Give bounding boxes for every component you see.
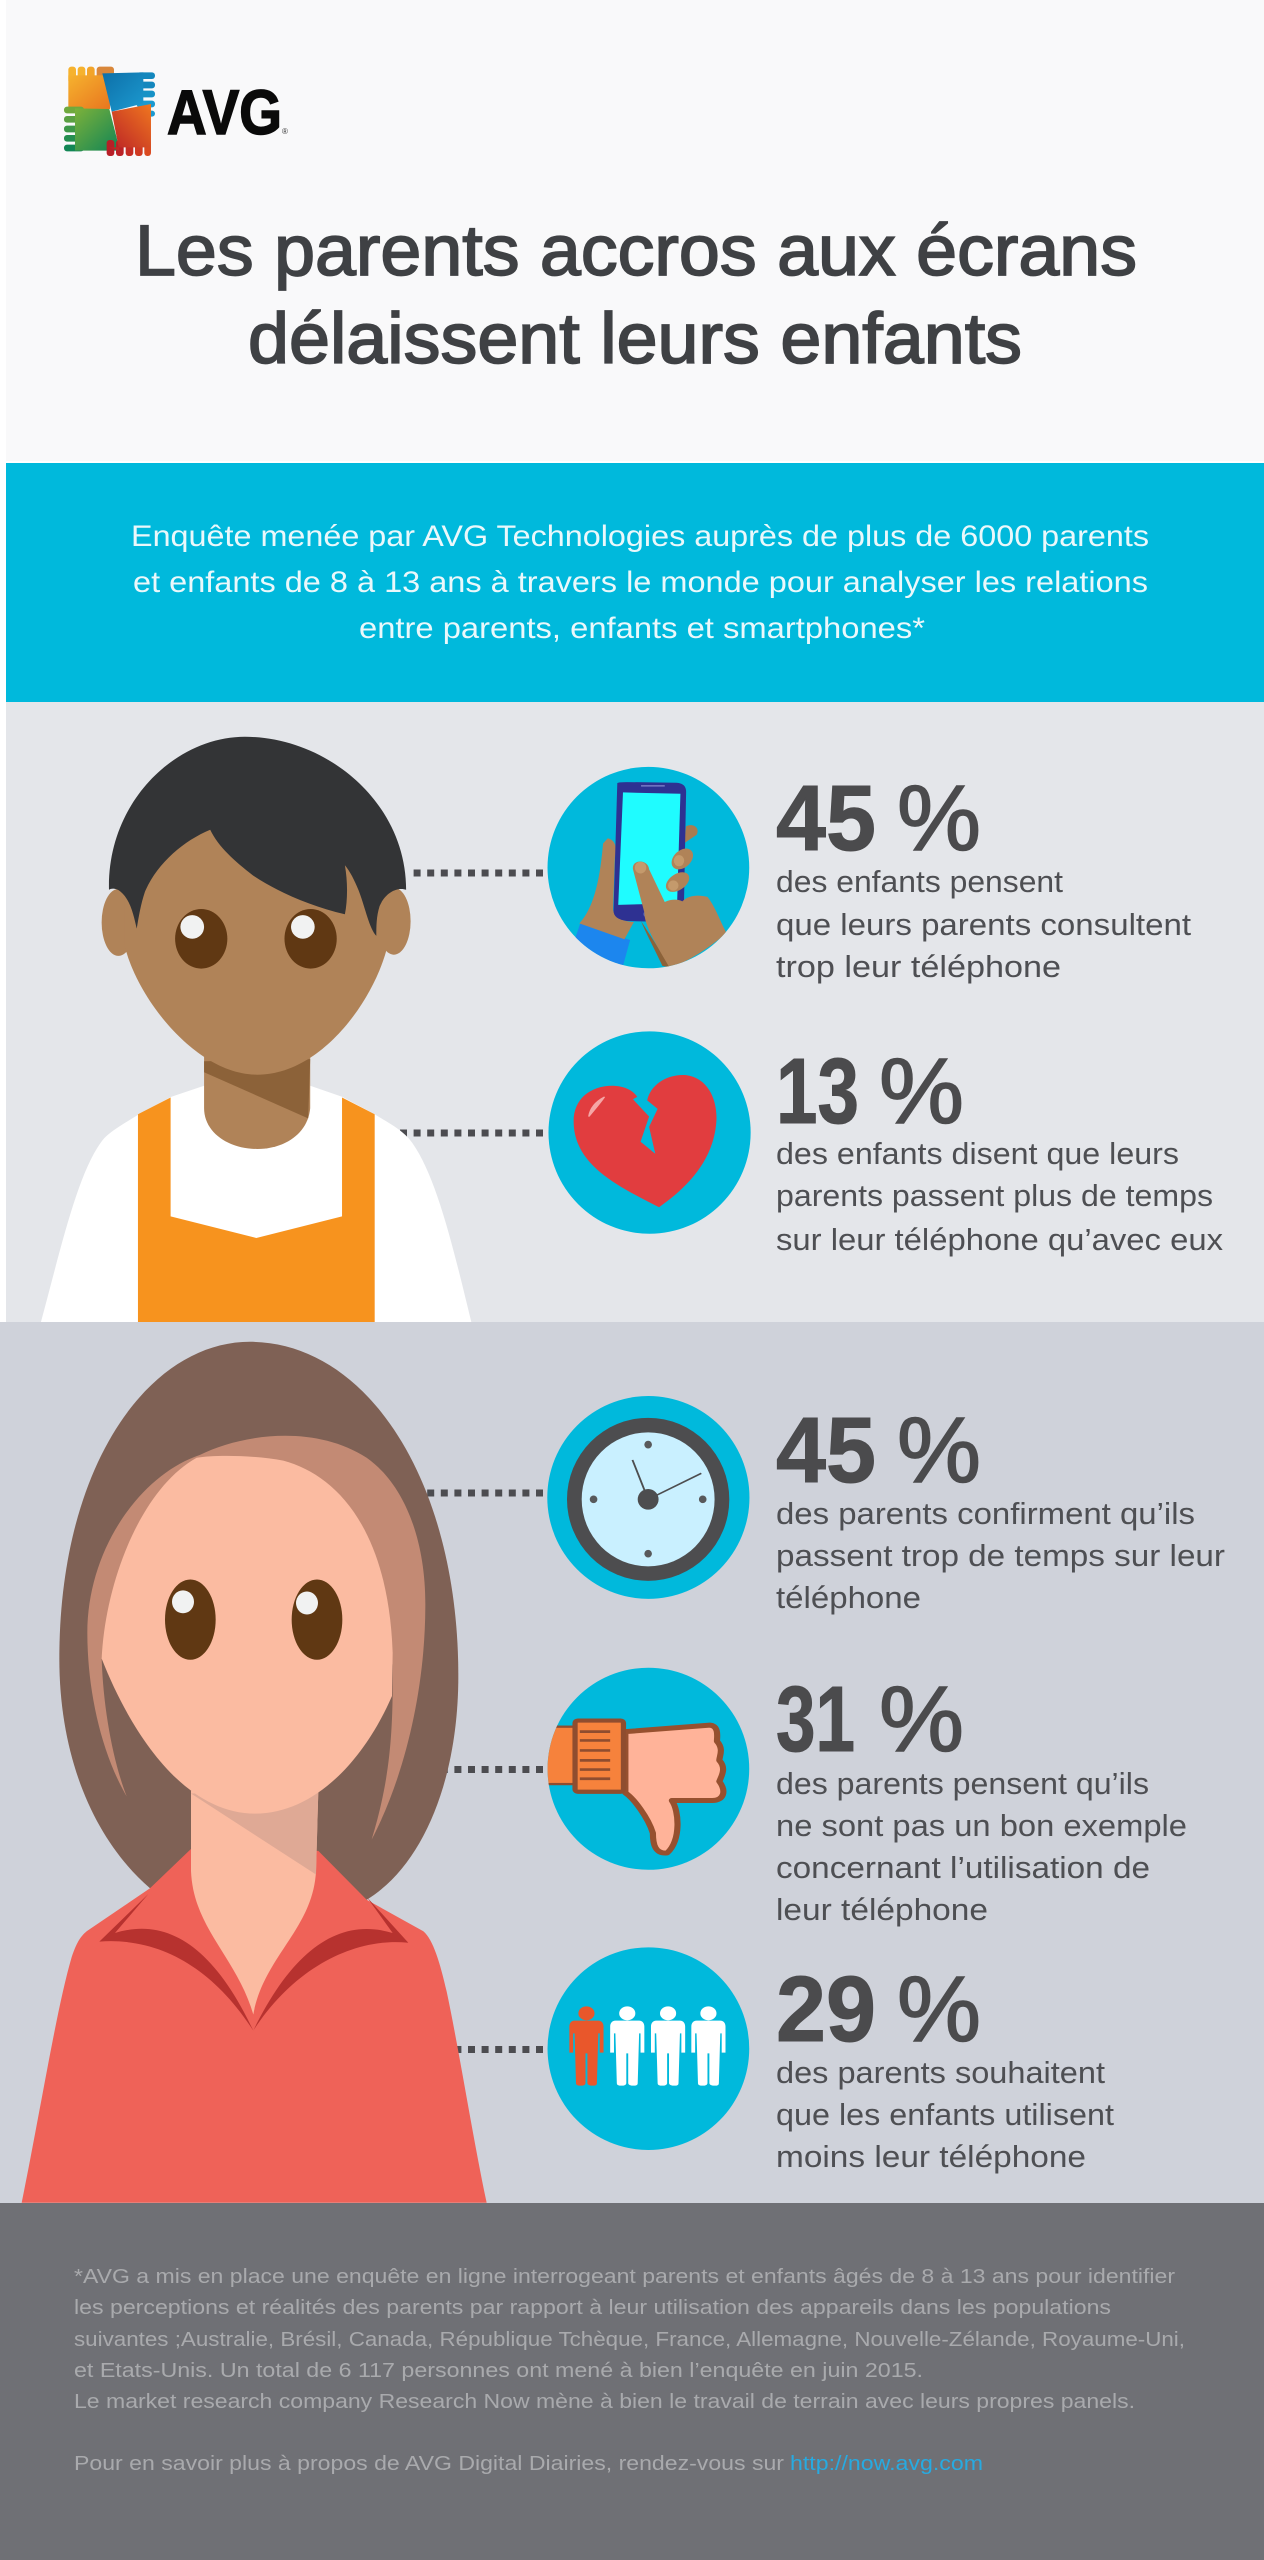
logo wordmark: ® [282, 127, 288, 136]
parent fringe [87, 1436, 425, 1839]
footnote text: *AVG a mis en place une enquête en ligne interrogeant parents et enfants âgés de 8 à 13 ans pour identifier [74, 2266, 1175, 2288]
footnote text [74, 2266, 1185, 2413]
stat: 45 % parents: % [897, 1398, 981, 1502]
left eye highlight [172, 1590, 194, 1613]
stat: 31 % parents: ne sont pas un bon exemple [776, 1808, 1187, 1843]
stat: 29 % parents: 29 [776, 1957, 876, 2061]
intro text: Enquête menée par AVG Technologies auprès de plus de 6000 parents [131, 520, 1149, 553]
connector: child to heart [395, 1130, 543, 1136]
neck shadow [191, 1791, 318, 1874]
stat: 13 % children [776, 1039, 1224, 1257]
icon: thumbs down [539, 1668, 749, 1870]
child shirt [41, 1086, 471, 1322]
child left ear [102, 889, 135, 956]
title: Les parents accros aux écrans [135, 212, 1137, 291]
intro text [131, 520, 1149, 645]
stat: 29 % parents: que les enfants utilisent [776, 2097, 1114, 2132]
connector: parent to thumb [430, 1766, 543, 1773]
parent shirt [22, 1849, 487, 2203]
person 4 [691, 2006, 726, 2086]
panel: parents [0, 1322, 1264, 2203]
intro text: entre parents, enfants et smartphones* [359, 612, 925, 645]
footnote text: les perceptions et réalités des parents par rapport à leur utilisation des appareils dans les populations [74, 2297, 1111, 2319]
stat: 31 % parents: concernant l’utilisation de [776, 1850, 1150, 1885]
right eye highlight [296, 1591, 318, 1614]
stat: 45 % children: 45 [776, 766, 876, 870]
child left eye [175, 909, 227, 969]
child hair [109, 737, 406, 936]
stat: 45 % children: que leurs parents consultent [776, 907, 1191, 942]
stat: 13 % children: sur leur téléphone qu’avec eux [776, 1222, 1224, 1257]
stat: 29 % parents: moins leur téléphone [776, 2139, 1086, 2174]
parent neck [191, 1791, 318, 2015]
panel: header [6, 0, 1264, 461]
stat: 31 % parents: des parents pensent qu’ils [776, 1766, 1149, 1801]
stat: 31 % parents: % [879, 1667, 964, 1771]
title [135, 212, 1137, 379]
footnote text: suivantes ;Australie, Brésil, Canada, République Tchèque, France, Allemagne, Nouvelle-Zélande, Royaume-Uni, [74, 2329, 1185, 2351]
icon: AVG four-colour mark [64, 67, 155, 156]
stat: 45 % parents [776, 1398, 1225, 1615]
logo: AVG [64, 67, 288, 156]
parent face [102, 1456, 393, 1814]
more information line: http://now.avg.com [790, 2453, 983, 2475]
more information line: Pour en savoir plus à propos de AVG Digital Diairies, rendez-vous sur [74, 2453, 784, 2475]
person 3 [651, 2006, 685, 2086]
panel: survey intro [6, 463, 1264, 702]
stat: 31 % parents [776, 1667, 1187, 1927]
child neck [204, 1051, 310, 1149]
icon: clock [547, 1396, 749, 1599]
stat: 45 % parents: 45 [776, 1398, 876, 1502]
person highlighted [569, 2006, 604, 2086]
intro text: et enfants de 8 à 13 ans à travers le monde pour analyser les relations [133, 566, 1148, 599]
stat: 45 % children: trop leur téléphone [776, 949, 1061, 984]
icon: four people [548, 1947, 749, 2150]
left eye highlight [180, 915, 204, 939]
right eye highlight [291, 915, 315, 939]
stat: 45 % children: % [897, 766, 981, 870]
stat: 45 % children: des enfants pensent [776, 864, 1063, 899]
panel: footer [0, 2203, 1264, 2560]
stat: 31 % parents: 31 [776, 1667, 855, 1771]
child illustration [41, 737, 471, 1322]
stat: 29 % parents [776, 1957, 1114, 2174]
connector: parent to clock [415, 1490, 543, 1496]
stat: 13 % children: des enfants disent que leurs [776, 1136, 1179, 1171]
stat: 45 % parents: téléphone [776, 1580, 921, 1615]
stat: 29 % parents: des parents souhaitent [776, 2055, 1105, 2090]
icon: hands holding phone [548, 767, 749, 969]
connector: child to phone [410, 870, 543, 876]
more information line [74, 2453, 983, 2475]
panel: children [6, 702, 1264, 1322]
logo wordmark: AVG [167, 78, 282, 148]
stat: 29 % parents: % [897, 1957, 981, 2061]
icon: broken heart [548, 1031, 751, 1234]
footnote text: Le market research company Research Now mène à bien le travail de terrain avec leurs propres panels. [74, 2391, 1135, 2413]
child face [124, 822, 388, 1075]
parent hair back [59, 1342, 458, 1900]
title: délaissent leurs enfants [248, 300, 1022, 379]
connector: parent to people [440, 2046, 543, 2053]
neck shadow [204, 1059, 310, 1118]
child right eye [284, 909, 337, 969]
stat: 45 % parents: des parents confirment qu’ils [776, 1496, 1195, 1531]
footnote text: et Etats-Unis. Un total de 6 117 personnes ont mené à bien l’enquête en juin 2015. [74, 2360, 923, 2382]
parent left eye [165, 1579, 216, 1660]
stat: 13 % children: 13 [776, 1039, 859, 1143]
left collar shadow [99, 1894, 253, 2031]
child right ear [377, 888, 411, 955]
stat: 31 % parents: leur téléphone [776, 1892, 988, 1927]
right collar shadow [253, 1897, 408, 2031]
child apron [138, 1098, 375, 1322]
person 2 [610, 2006, 644, 2086]
parent illustration [22, 1342, 487, 2203]
parent right eye [292, 1579, 342, 1660]
stat: 45 % parents: passent trop de temps sur leur [776, 1538, 1225, 1573]
stat: 13 % children: % [879, 1039, 964, 1143]
stat: 45 % children [776, 766, 1191, 984]
stat: 13 % children: parents passent plus de temps [776, 1178, 1213, 1213]
